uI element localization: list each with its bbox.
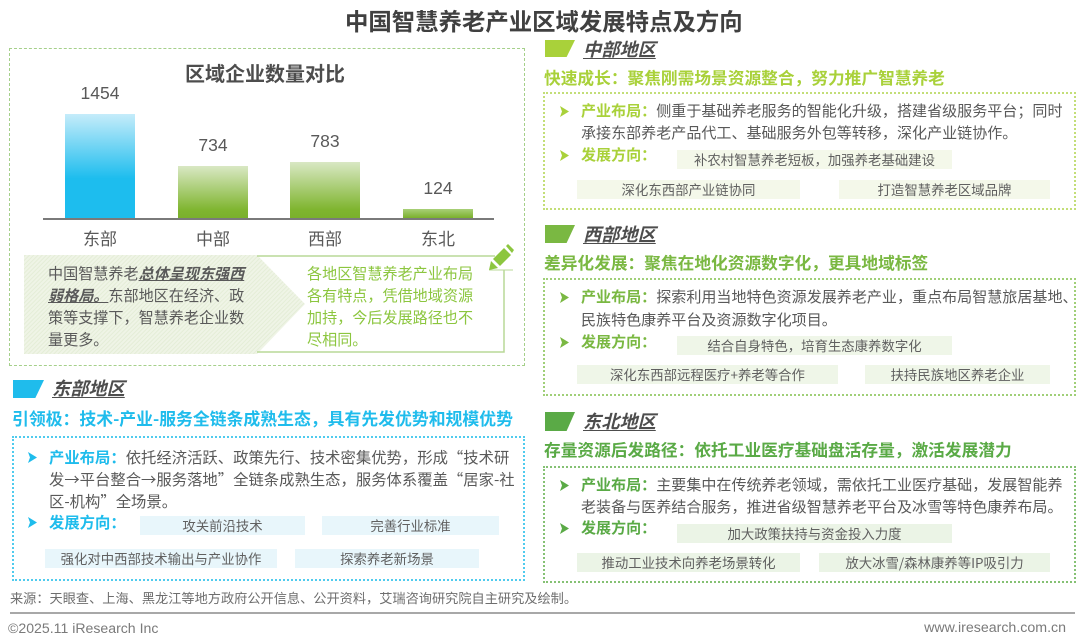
panel: 东部地区 xyxy=(12,375,525,581)
summary left text: 弱格局。东部地区在经济、政 xyxy=(48,284,244,306)
chip: 强化对中西部技术输出与产业协作 xyxy=(61,548,261,568)
detail box xyxy=(543,278,1078,396)
chip xyxy=(322,516,499,535)
chip: 推动工业技术向养老场景转化 xyxy=(601,552,776,572)
direction label: 发展方向： xyxy=(581,517,656,538)
industry layout text: 产业布局：侧重于基础养老服务的智能化升级，搭建省级服务平台；同时 xyxy=(581,100,1062,121)
chip xyxy=(677,524,952,543)
copyright: ©2025.11 iResearch Inc xyxy=(8,620,158,636)
industry layout text xyxy=(49,446,515,512)
chip: 结合自身特色，培育生态康养数字化 xyxy=(707,335,922,355)
summary right text xyxy=(307,262,473,350)
chip xyxy=(577,180,800,199)
industry layout text: 产业布局：探索利用当地特色资源发展养老产业，重点布局智慧旅居基地、 xyxy=(581,286,1078,307)
region heading: 西部地区 xyxy=(583,221,656,247)
icon: northeast marker xyxy=(545,412,575,431)
icon: west marker xyxy=(545,225,575,243)
chip: 攻关前沿技术 xyxy=(182,515,263,535)
summary callout xyxy=(24,244,514,354)
arrow bullet xyxy=(560,106,569,117)
chip: 放大冰雪/森林康养等IP吸引力 xyxy=(845,552,1024,572)
website: www.iresearch.com.cn xyxy=(924,620,1066,636)
chip xyxy=(295,549,479,568)
chip: 深化东西部远程医疗+养老等合作 xyxy=(610,364,805,384)
industry layout text xyxy=(581,100,1062,143)
detail box xyxy=(543,466,1076,583)
summary right text: 各有特点，凭借地域资源 xyxy=(307,284,473,306)
region subtitle: 引领极：技术-产业-服务全链条成熟生态，具有先发优势和规模优势 xyxy=(12,405,513,430)
summary right text: 各地区智慧养老产业布局 xyxy=(307,262,473,284)
chip xyxy=(865,365,1050,384)
arrow bullet xyxy=(560,292,569,303)
summary right text: 加持，今后发展路径也不 xyxy=(307,306,473,328)
source note: 来源：天眼查、上海、黑龙江等地方政府公开信息、公开资料，艾瑞咨询研究院自主研究及绘制。 xyxy=(10,588,577,607)
summary left text xyxy=(48,262,246,350)
industry layout text xyxy=(581,474,1062,517)
label 东北: 东北 xyxy=(421,225,455,250)
label 西部: 西部 xyxy=(308,225,342,250)
direction label: 发展方向： xyxy=(581,331,656,352)
chip: 扶持民族地区养老企业 xyxy=(891,364,1024,384)
label 东部: 东部 xyxy=(83,225,117,250)
chip: 完善行业标准 xyxy=(370,515,451,535)
value 中部: 734 xyxy=(198,135,228,155)
summary left text: 策等支撑下，智慧养老企业数 xyxy=(48,306,244,328)
chip: 加大政策扶持与资金投入力度 xyxy=(727,523,902,543)
bar 西部 xyxy=(290,162,360,218)
region subtitle: 快速成长：聚焦刚需场景资源整合，努力推广智慧养老 xyxy=(544,65,945,89)
value 东北: 124 xyxy=(423,178,453,198)
panel: 西部地区 xyxy=(543,221,1078,396)
panel: 东北地区 xyxy=(543,408,1076,583)
detail box xyxy=(12,436,525,581)
icon: east marker xyxy=(13,380,44,398)
summary left text: 中国智慧养老总体呈现东强西 xyxy=(48,262,244,284)
region heading: 东部地区 xyxy=(52,375,125,401)
direction label: 发展方向： xyxy=(49,511,126,533)
chip: 补农村智慧养老短板，加强养老基础建设 xyxy=(694,149,935,169)
arrow bullet xyxy=(560,523,569,534)
title: 中国智慧养老产业区域发展特点及方向 xyxy=(345,3,743,37)
chart heading: 区域企业数量对比 xyxy=(185,58,345,87)
chip: 深化东西部产业链协同 xyxy=(622,179,755,199)
label 中部: 中部 xyxy=(196,225,230,250)
region heading: 中部地区 xyxy=(583,36,656,62)
direction label: 发展方向： xyxy=(581,144,656,165)
summary left text: 量更多。 xyxy=(48,328,108,350)
chip: 打造智慧养老区域品牌 xyxy=(878,179,1011,199)
value 东部: 1454 xyxy=(81,83,119,103)
chip: 探索养老新场景 xyxy=(340,548,434,568)
summary frame xyxy=(24,244,514,354)
region heading: 东北地区 xyxy=(583,408,656,434)
industry layout text: 老装备与医养结合服务，推进省级智慧养老平台及冰雪等特色康养布局。 xyxy=(581,496,1062,517)
industry layout text: 产业布局：主要集中在传统养老领域，需依托工业医疗基础，发展智能养 xyxy=(581,474,1062,495)
industry layout text: 产业布局：依托经济活跃、政策先行、技术密集优势，形成“技术研 xyxy=(49,446,509,468)
panel: 中部地区 xyxy=(543,36,1076,210)
bar chart xyxy=(43,83,494,250)
summary right text: 尽相同。 xyxy=(307,328,367,350)
value 西部: 783 xyxy=(310,131,340,151)
region subtitle: 存量资源后发路径：依托工业医疗基础盘活存量，激活发展潜力 xyxy=(544,437,1012,461)
chip xyxy=(140,516,305,535)
industry layout text: 区-机构”全场景。 xyxy=(49,490,177,512)
icon: central marker xyxy=(545,40,575,57)
industry layout text: 承接东部养老产品代工、基础服务外包等转移，深化产业链协作。 xyxy=(581,122,1017,143)
industry layout text: 民族特色康养平台及资源数字化项目。 xyxy=(581,309,837,330)
industry layout text xyxy=(581,286,1078,330)
industry layout text: 发→平台整合→服务落地”全链条成熟生态，服务体系覆盖“居家-社 xyxy=(49,468,515,490)
detail box xyxy=(543,92,1076,210)
bar 东北 xyxy=(403,209,473,218)
icon: pencil xyxy=(489,244,514,270)
arrow bullet xyxy=(28,517,37,528)
chip xyxy=(839,180,1050,199)
arrow bullet xyxy=(28,452,37,463)
arrow bullet xyxy=(560,480,569,491)
arrow bullet xyxy=(560,337,569,348)
bar 东部 xyxy=(65,114,135,218)
bar 中部 xyxy=(178,166,248,218)
region subtitle: 差异化发展：聚焦在地化资源数字化，更具地域标签 xyxy=(544,250,928,274)
panel: regional enterprise comparison xyxy=(9,48,525,366)
arrow bullet xyxy=(560,150,569,161)
